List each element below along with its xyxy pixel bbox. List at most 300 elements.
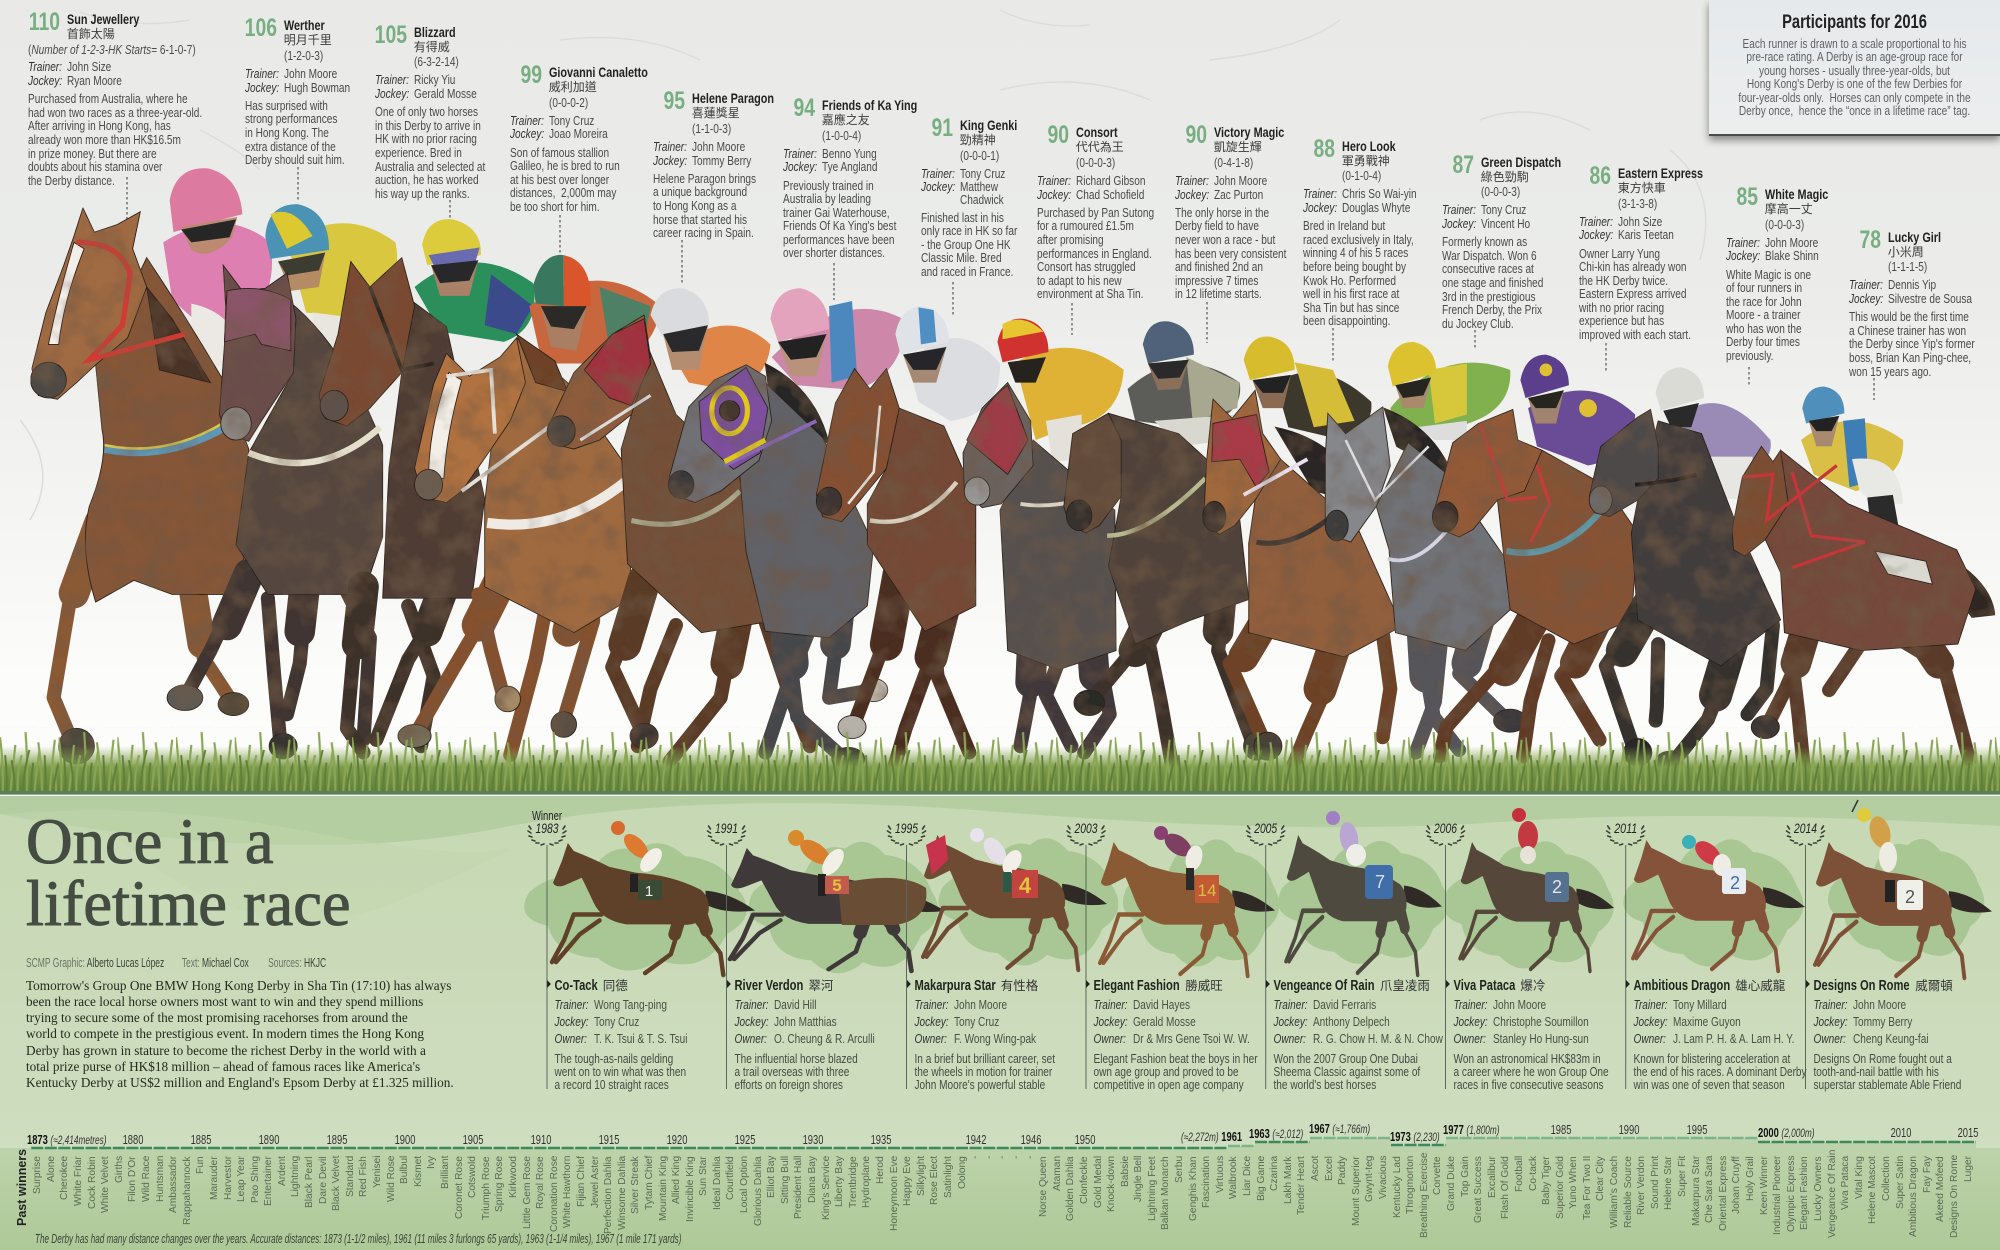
- past winners name list: Bulbul: [399, 1156, 410, 1184]
- winner 2003 Elegant Fashion illustration: [1100, 826, 1275, 976]
- past winners name list: White Friar: [73, 1156, 84, 1206]
- past winners name list: Breathing Exercise: [1419, 1152, 1430, 1238]
- horse 6: grey runner in purple hood: [668, 364, 888, 770]
- runner: Blizzard: Ricky Yiu: [414, 72, 455, 87]
- past winners name list: Hydroplane: [861, 1156, 872, 1208]
- timeline year labels: 1920: [667, 1132, 687, 1147]
- runner: Friends of Ka Ying: over shorter distances.: [783, 245, 885, 260]
- green lower panel background: [0, 796, 2000, 1250]
- past winners name list: Glorious Dahlia: [753, 1156, 764, 1226]
- runner: Giovanni Canaletto: [510, 61, 648, 214]
- winner: Designs On Rome: Jockey:: [1813, 1014, 1847, 1029]
- runner: Friends of Ka Ying: Trainer:: [783, 146, 817, 161]
- winner: Designs On Rome: [1806, 978, 1961, 1092]
- winner: River Verdon: 翠河: [808, 979, 833, 993]
- runner: Lucky Girl: (1-1-1-5): [1888, 259, 1927, 274]
- past winners name list: Serbu: [1174, 1156, 1185, 1183]
- runner: White Magic: (0-0-0-3): [1765, 216, 1804, 232]
- past winners name list: Little Gem Rose: [522, 1156, 533, 1229]
- winner years: 2005: [1253, 820, 1277, 836]
- winner: Vengeance Of Rain: [1266, 978, 1443, 1092]
- past winners name list: Excalibur: [1487, 1156, 1498, 1198]
- runner: Friends of Ka Ying: trainer Gai Waterhouse,: [783, 205, 889, 220]
- winner 2003 Elegant Fashion illustration: 14: [1198, 881, 1216, 900]
- runner: Sun Jewellery: the Derby distance.: [28, 173, 115, 188]
- past winners name list: Pao Shing: [250, 1156, 261, 1203]
- jockey 6: pink and blue silks: [770, 288, 904, 390]
- past winners name list: Invincible King: [685, 1156, 696, 1222]
- runner: Victory Magic: Zac Purton: [1213, 187, 1263, 202]
- runner: White Magic: Moore - a trainer: [1726, 307, 1800, 322]
- winner: Vengeance Of Rain: Jockey:: [1273, 1014, 1307, 1029]
- past winners name list: Paddy: [1337, 1156, 1348, 1185]
- jockey 1: pink silks: [163, 168, 272, 370]
- runner: Friends of Ka Ying: [783, 94, 917, 260]
- winner: Co-Tack: Wong Tang-ping: [594, 997, 667, 1012]
- runner: Hero Look: raced exclusively in Italy,: [1303, 232, 1414, 247]
- timeline year labels: 1873 (≈2,414metres): [27, 1132, 107, 1147]
- runner: White Magic: White Magic: [1765, 186, 1828, 202]
- runner: Lucky Girl: Dennis Yip: [1888, 277, 1936, 292]
- runner: Lucky Girl: [1849, 226, 1975, 379]
- winner: Elegant Fashion: [1086, 978, 1258, 1092]
- runner: Lucky Girl: a Chinese trainer has won: [1849, 323, 1966, 338]
- runner: Werther: 明月千里: [284, 33, 332, 47]
- runner: Green Dispatch: [1442, 151, 1561, 331]
- winner: Viva Pataca: a career where he won Group One: [1453, 1064, 1608, 1079]
- winner 2005 Vengeance Of Rain illustration: [1286, 811, 1442, 975]
- winner: Makarpura Star: John Moore's powerful stable: [914, 1077, 1045, 1092]
- winner: Ambitious Dragon: 雄心威龍: [1735, 979, 1785, 993]
- timeline year labels: 1973 (2,230): [1390, 1129, 1440, 1144]
- past winners name list: Genghis Khan: [1188, 1156, 1199, 1221]
- winner: Ambitious Dragon: [1626, 978, 1806, 1092]
- past winners name list: River Verdon: [1636, 1156, 1647, 1215]
- past winners name list: President Hall: [793, 1156, 804, 1219]
- past winners name list: Cock Robin: [87, 1156, 98, 1209]
- past winners name list: Kirkwood: [508, 1156, 519, 1198]
- winner: Vengeance Of Rain: R. G. Chow H. M. & N. Chow: [1313, 1031, 1443, 1046]
- past winners name list: Norse Queen: [1038, 1156, 1049, 1217]
- runner: Hero Look: [1303, 135, 1417, 328]
- past winners name list: Courtfield: [725, 1156, 736, 1200]
- runner: Helene Paragon: Jockey:: [653, 153, 687, 168]
- timeline year labels: 1895: [327, 1132, 347, 1147]
- runner: Victory Magic: Victory Magic: [1213, 124, 1284, 140]
- winner: Vengeance Of Rain: 爪皇凌雨: [1380, 979, 1430, 993]
- winner: Viva Pataca: Trainer:: [1453, 997, 1487, 1012]
- runner: Victory Magic: Derby field to have: [1174, 218, 1259, 233]
- past winners name list: Winsome Dahlia: [617, 1156, 628, 1230]
- past winners name list: Vital King: [1854, 1156, 1865, 1199]
- runner: Victory Magic: Trainer:: [1174, 173, 1208, 188]
- runner: Lucky Girl: This would be the first time: [1849, 309, 1969, 324]
- past winners name list: Perfection Dahlia: [603, 1156, 614, 1234]
- runner: White Magic: who has won the: [1726, 321, 1802, 336]
- winner: Designs On Rome: Cheng Keung-fai: [1852, 1031, 1928, 1046]
- jockey 2: yellow silks: [265, 204, 397, 370]
- past winners name list: Big Game: [1256, 1156, 1267, 1201]
- winner: River Verdon: a trail overseas with three: [734, 1064, 849, 1079]
- runner: Hero Look: been disappointing.: [1303, 313, 1390, 328]
- runner: Green Dispatch: du Jockey Club.: [1442, 316, 1514, 331]
- past winners name list: Fascination: [1201, 1156, 1212, 1208]
- past winners name list: Akeed Mofeed: [1935, 1156, 1946, 1222]
- runner: Helene Paragon: 喜蓮獎星: [692, 106, 740, 120]
- timeline year labels: 1967 (≈1,766m): [1309, 1121, 1370, 1136]
- runner: Giovanni Canaletto: distances, 2,000m may: [510, 185, 616, 200]
- winner: Co-Tack: T. K. Tsui & T. S. Tsui: [594, 1031, 687, 1046]
- jockey 12: purple and yellow silks: [1520, 355, 1635, 466]
- runner: King Genki: - the Group One HK: [921, 237, 1011, 252]
- horse 11: Green Dispatch: [1325, 407, 1527, 753]
- winner: Vengeance Of Rain: Owner:: [1273, 1031, 1306, 1046]
- past winners name list: Herod: [875, 1156, 886, 1184]
- past winners name list: Entertainer: [263, 1156, 274, 1206]
- winner years: 2006: [1433, 820, 1457, 836]
- winner: Vengeance Of Rain: the world's best horses: [1273, 1077, 1376, 1092]
- runner: Friends of Ka Ying: Friends of Ka Ying: [822, 97, 917, 113]
- runner: Sun Jewellery: already won more than HK$16.5m: [28, 132, 181, 147]
- runner: Friends of Ka Ying: Friends Of Ka Ying's best: [783, 218, 896, 233]
- runner: Lucky Girl: won 15 years ago.: [1849, 364, 1931, 379]
- runner: White Magic: of four runners in: [1726, 280, 1802, 295]
- past winners name list: Gold Medal: [1092, 1156, 1104, 1208]
- winner: River Verdon: John Matthias: [773, 1014, 836, 1029]
- winner: Viva Pataca: Stanley Ho Hung-sun: [1492, 1031, 1588, 1046]
- runner: Hero Look: 軍勇戰神: [1342, 154, 1390, 168]
- runner: Eastern Express: Eastern Express arrived: [1579, 286, 1687, 301]
- text: participants note: Derby once, hence the “once in a lifetime race” tag.: [1739, 103, 1970, 118]
- runner: White Magic: previously.: [1726, 348, 1773, 363]
- past winners name list: Mount Superior: [1351, 1156, 1362, 1226]
- past winners name list: Mountain King: [658, 1156, 668, 1221]
- runner: Consort: Trainer:: [1037, 173, 1071, 188]
- runner: Victory Magic: 凱旋生輝: [1213, 140, 1261, 154]
- runner: Victory Magic: 90: [1185, 121, 1207, 149]
- runner: Eastern Express: Eastern Express: [1618, 165, 1703, 181]
- past winners name list: -: [1025, 1156, 1036, 1159]
- runner: Helene Paragon: (1-1-0-3): [692, 121, 731, 136]
- runner: Werther: 106: [245, 14, 277, 42]
- runner: Helene Paragon: to Hong Kong as a: [653, 198, 736, 213]
- past winners name list: Superior Gold: [1555, 1156, 1566, 1219]
- winner: Viva Pataca: John Moore: [1492, 997, 1546, 1012]
- jockey 14: yellow and blue silks: [1801, 386, 1906, 566]
- past winners name list: Gwynt-teg: [1364, 1156, 1375, 1202]
- runner: Consort: to adapt to his new: [1037, 273, 1121, 288]
- runner: Helene Paragon: [653, 87, 774, 240]
- runner: Victory Magic: never won a race - but: [1174, 232, 1275, 247]
- winner: Elegant Fashion: Trainer:: [1094, 997, 1127, 1012]
- runner: Blizzard: Australia and selected at: [375, 159, 485, 174]
- winner: Makarpura Star: the wheels in motion for trainer: [914, 1064, 1052, 1079]
- intro text: world to compete in the prestigious event. In modern times the Hong Kong: [26, 1027, 424, 1042]
- timeline year labels: 1985: [1551, 1122, 1571, 1137]
- past winners name list: Super Satin: [1895, 1156, 1906, 1209]
- runner: Hero Look: Douglas Whyte: [1342, 200, 1410, 215]
- past winners name list: Rappahannock: [182, 1156, 193, 1225]
- runner: Werther: (1-2-0-3): [284, 48, 323, 63]
- runner: Sun Jewellery: (Number of 1-2-3-HK Starts= 6-1-0-7): [28, 42, 196, 57]
- runner: Green Dispatch: 3rd in the prestigious: [1442, 289, 1536, 304]
- past winners name list: Yenisei: [372, 1156, 383, 1188]
- horses group with painted mottling: [31, 208, 1995, 772]
- runner: Blizzard: auction, he has worked: [375, 172, 479, 187]
- runner: Friends of Ka Ying: Tye Angland: [822, 159, 877, 174]
- runner: White Magic: the race for John: [1726, 294, 1802, 309]
- past winners name list: Fun: [195, 1156, 206, 1174]
- winner: Designs On Rome: Tommy Berry: [1852, 1014, 1912, 1029]
- past winners name list: Ambassador: [168, 1156, 179, 1213]
- runner: Blizzard: Blizzard: [414, 24, 456, 40]
- winner 2006 Viva Pataca illustration: [1460, 808, 1614, 971]
- past winners name list: Fijian Chief: [576, 1156, 587, 1207]
- past winners name list: Marauder: [209, 1156, 220, 1200]
- past winners name list: Oriental Express: [1718, 1156, 1729, 1231]
- runner: Blizzard: One of only two horses: [375, 104, 478, 119]
- runner: King Genki: Finished last in his: [921, 210, 1004, 224]
- winner: River Verdon: Jockey:: [734, 1014, 768, 1029]
- winner: Makarpura Star: F. Wong Wing-pak: [953, 1031, 1036, 1046]
- runner: Werther: Has surprised with: [245, 98, 328, 113]
- runner: Sun Jewellery: John Size: [67, 59, 111, 74]
- winner 1991 River Verdon illustration: 5: [832, 876, 842, 895]
- runner: Eastern Express: Jockey:: [1579, 227, 1613, 242]
- past winners name list: White Hawthorn: [562, 1156, 573, 1228]
- winner: River Verdon: O. Cheung & R. Arculli: [773, 1031, 874, 1046]
- jockey 7: white silks: [895, 306, 1000, 421]
- past winners name list: Designs On Rome: [1949, 1155, 1960, 1238]
- past winners name list: Ascot: [1310, 1156, 1321, 1181]
- past winners name list: Alone: [46, 1156, 57, 1182]
- winner: Makarpura Star: Jockey:: [914, 1014, 948, 1029]
- runner: Helene Paragon: Tommy Berry: [692, 153, 751, 168]
- runner: Eastern Express: 86: [1589, 162, 1611, 190]
- runner: Hero Look: Chris So Wai-yin: [1342, 186, 1417, 201]
- winner: Co-Tack: Owner:: [555, 1031, 587, 1046]
- runner: Eastern Express: 東方快車: [1618, 181, 1666, 195]
- runner: Friends of Ka Ying: Previously trained in: [783, 178, 873, 192]
- jockey 5: orange silks: [651, 288, 770, 390]
- runner: Werther: extra distance of the: [245, 139, 336, 154]
- past winners name list: Babsie: [1120, 1156, 1131, 1187]
- runner: Werther: in Hong Kong. The: [245, 125, 329, 140]
- past winners name list: Great Success: [1473, 1156, 1484, 1223]
- winner: Viva Pataca: Viva Pataca: [1453, 978, 1515, 994]
- runner: White Magic: [1726, 183, 1828, 363]
- winner: Makarpura Star: John Moore: [953, 997, 1007, 1012]
- runner: King Genki: and raced in France.: [921, 264, 1014, 279]
- past winners name list: Lightning Feet: [1147, 1156, 1158, 1221]
- winner years: [532, 808, 1817, 836]
- past winners name list: Helene Mascot: [1867, 1156, 1878, 1224]
- runner: Consort: Consort: [1076, 124, 1117, 140]
- leader lines from text to riders: [126, 167, 1874, 400]
- intro text: [26, 978, 454, 1091]
- past winners name list: Golden Dahlia: [1065, 1156, 1076, 1221]
- timeline year labels: 1995: [1687, 1122, 1707, 1137]
- runner: Consort: 90: [1047, 121, 1069, 149]
- past winners name list: Royal Rose: [535, 1156, 546, 1209]
- winner: Designs On Rome: superstar stablemate Able Friend: [1813, 1077, 1961, 1092]
- winner 2011 Ambitious Dragon illustration: 2: [1730, 873, 1740, 893]
- intro text: trying to secure some of the most promising racehorses from around the: [26, 1011, 408, 1026]
- past winners name list: Harvestor: [222, 1156, 234, 1200]
- runner: Victory Magic: in 12 lifetime starts.: [1174, 286, 1261, 301]
- runner: Giovanni Canaletto: at his best over longer: [510, 172, 609, 187]
- past winners name list: Virtuous: [1215, 1156, 1226, 1193]
- winner: Makarpura Star: Tony Cruz: [953, 1014, 999, 1029]
- runner: Blizzard: [375, 21, 486, 201]
- past winners name list: Fay Fay: [1922, 1156, 1933, 1193]
- past winners name list: Lightning: [290, 1156, 301, 1197]
- past winners name list: Diana Bay: [807, 1156, 818, 1203]
- winner: Elegant Fashion: own age group and proved to be: [1094, 1064, 1239, 1079]
- runner: Victory Magic: [1174, 121, 1286, 301]
- past winners name list: Tender Heart: [1296, 1156, 1307, 1215]
- runner: Green Dispatch: Formerly known as: [1442, 234, 1527, 249]
- runner: Giovanni Canaletto: Tony Cruz: [549, 113, 594, 128]
- intro text: Tomorrow's Group One BMW Hong Kong Derby in Sha Tin (17:10) has always: [26, 978, 451, 994]
- runner: Green Dispatch: Green Dispatch: [1481, 154, 1561, 170]
- winner: Viva Pataca: races in five consecutive seasons: [1453, 1077, 1603, 1092]
- footnote: The Derby has had many distance changes over the years. Accurate distances: 1873 (1-1/2 miles), 1961 (11 miles 3 furlongs 65 yards), 1963 (1-1/4 miles), 1967 (1 mile 171 yards): [35, 1232, 681, 1246]
- runner: Victory Magic: Jockey:: [1174, 187, 1209, 202]
- past winners name list: -: [984, 1156, 995, 1159]
- past winners name list: Wild Rose: [386, 1156, 397, 1202]
- jockey 4: red and green silks: [529, 255, 661, 364]
- past winners name list: Brilliant: [440, 1156, 451, 1189]
- past winners name list: Liberty Bay: [834, 1156, 845, 1207]
- winner years: 1995: [895, 820, 918, 836]
- winner: Viva Pataca: 爆冷: [1520, 979, 1545, 993]
- runner: Green Dispatch: Jockey:: [1442, 216, 1476, 231]
- runner: King Genki: Tony Cruz: [960, 166, 1006, 181]
- runner: Consort: (0-0-0-3): [1076, 155, 1115, 170]
- runner: Lucky Girl: Jockey:: [1849, 291, 1883, 306]
- past winners name list: Kentucky Lad: [1392, 1156, 1403, 1218]
- runner: Helene Paragon: horse that started his: [653, 212, 747, 227]
- winner years: 2003: [1074, 820, 1098, 836]
- runner: Giovanni Canaletto: be too short for him.: [510, 199, 600, 214]
- runner: Giovanni Canaletto: Galileo, he is bred to run: [510, 158, 620, 173]
- winner: Designs On Rome: 威爾頓: [1914, 979, 1952, 993]
- runner: Hero Look: Bred in Ireland but: [1303, 218, 1385, 233]
- past winners name list: Czarina: [1269, 1156, 1280, 1191]
- runner: Friends of Ka Ying: Jockey:: [783, 159, 817, 174]
- horse 7: King Genki: [816, 369, 976, 772]
- runner: Consort: environment at Sha Tin.: [1037, 286, 1143, 301]
- runner: Sun Jewellery: After arriving in Hong Kong, has: [28, 118, 171, 133]
- past winners name list: Sound Print: [1650, 1156, 1661, 1209]
- timeline year labels: 2010: [1891, 1125, 1911, 1140]
- winner: Ambitious Dragon: Maxime Guyon: [1673, 1014, 1740, 1029]
- runner: Helene Paragon: career racing in Spain.: [653, 225, 753, 240]
- past winners name list: Local Option: [739, 1156, 750, 1213]
- runner: Friends of Ka Ying: 94: [793, 94, 815, 122]
- horse 3: Blizzard: [319, 258, 485, 753]
- winner: Elegant Fashion: Dr & Mrs Gene Tsoi W. W.: [1133, 1031, 1250, 1046]
- runner: King Genki: Matthew: [960, 179, 998, 194]
- timeline year labels: 1880: [123, 1132, 143, 1147]
- runner: White Magic: 85: [1736, 183, 1758, 211]
- runner: Hero Look: Jockey:: [1303, 200, 1337, 215]
- timeline year labels: 1915: [599, 1132, 619, 1147]
- runner: Blizzard: HK with no prior racing: [375, 131, 477, 146]
- timeline year labels: 1935: [871, 1132, 891, 1147]
- past winners name list: Helene Star: [1663, 1156, 1674, 1210]
- runner: Eastern Express: (3-1-3-8): [1618, 196, 1657, 210]
- runner: King Genki: 勁精神: [960, 133, 996, 147]
- runner: Green Dispatch: French Derby, the Prix: [1442, 302, 1542, 317]
- runner: Sun Jewellery: Purchased from Australia, where he: [28, 91, 188, 106]
- winner: Viva Pataca: Jockey:: [1453, 1014, 1487, 1029]
- winner: Vengeance Of Rain: Trainer:: [1273, 997, 1307, 1012]
- runner: Lucky Girl: boss, Brian Kan Ping-chee,: [1849, 350, 1971, 365]
- winner: Makarpura Star: 有性格: [1001, 979, 1038, 993]
- runner: Werther: Derby should suit him.: [245, 152, 345, 167]
- runner: King Genki: 91: [932, 114, 953, 142]
- intro text: Derby has grown in stature to become the richest Derby in the world with a: [26, 1044, 426, 1059]
- runner: Helene Paragon: a unique background: [653, 184, 747, 199]
- jockey 8: yellow and red silks: [997, 319, 1124, 462]
- runner: Consort: Jockey:: [1037, 187, 1071, 202]
- past winners name list: Honeymoon Eve: [889, 1156, 900, 1231]
- horse 1: Sun Jewellery: [31, 208, 249, 764]
- runner: Eastern Express: improved with each start.: [1579, 327, 1691, 342]
- winner: Co-Tack: a record 10 straight races: [555, 1077, 669, 1092]
- runner: Green Dispatch: War Dispatch. Won 6: [1442, 248, 1537, 263]
- past winners name list: Elliot Bay: [766, 1156, 777, 1198]
- past winners name list: Ataman: [1052, 1156, 1063, 1191]
- timeline year labels: 2000 (2,000m): [1758, 1125, 1815, 1140]
- text: participants note: Hong Kong's Derby is one of the few Derbies for: [1747, 76, 1962, 91]
- runner: Hero Look: well in his first race at: [1303, 286, 1399, 301]
- runner: Consort: 代代為王: [1076, 140, 1124, 154]
- winner: Designs On Rome: John Moore: [1852, 997, 1906, 1012]
- timeline year labels: 1963 (≈2,012): [1249, 1126, 1303, 1141]
- runner: Eastern Express: with no prior racing: [1579, 300, 1664, 315]
- past winners name list: Vengeance Of Rain: [1827, 1150, 1838, 1238]
- winner 1983 Co-Tack illustration: 1: [645, 883, 653, 900]
- past winners name list: Triumph Rose: [481, 1156, 492, 1220]
- runner: Eastern Express: experience but has: [1579, 313, 1664, 328]
- runner: Eastern Express: Karis Teetan: [1618, 227, 1674, 242]
- runner: Consort: Chad Schofield: [1076, 187, 1144, 202]
- timeline year labels: 2015: [1958, 1125, 1978, 1140]
- runner: Green Dispatch: Trainer:: [1442, 202, 1476, 217]
- runner: Hero Look: before being bought by: [1303, 259, 1406, 274]
- horse 4: Giovanni Canaletto: [398, 334, 631, 755]
- jockeys group, riding behind the horses' necks: [163, 168, 1906, 566]
- title: Once in a: [26, 805, 274, 877]
- past winners name list: Kismet: [413, 1156, 424, 1187]
- runner: Eastern Express: [1579, 162, 1703, 342]
- past winners name list: Che Sara Sara: [1704, 1156, 1715, 1223]
- runner: Green Dispatch: consecutive races at: [1442, 261, 1534, 276]
- past winners name list: Tytam Chief: [644, 1156, 655, 1210]
- past winners name list: Surprise: [32, 1156, 43, 1194]
- past winners name list: Elegant Fashion: [1799, 1156, 1810, 1230]
- winner 2005 Vengeance Of Rain illustration: 7: [1375, 872, 1385, 892]
- past winners name list: Liar Dice: [1242, 1156, 1253, 1196]
- runner: Eastern Express: Chi-kin has already won: [1579, 259, 1687, 274]
- past winners heading: Past winners: [15, 1149, 29, 1226]
- winner: Makarpura Star: Owner:: [914, 1031, 946, 1046]
- runner: King Genki: only race in HK so far: [921, 223, 1018, 238]
- past winners name list: Industrial Pioneer: [1772, 1156, 1783, 1235]
